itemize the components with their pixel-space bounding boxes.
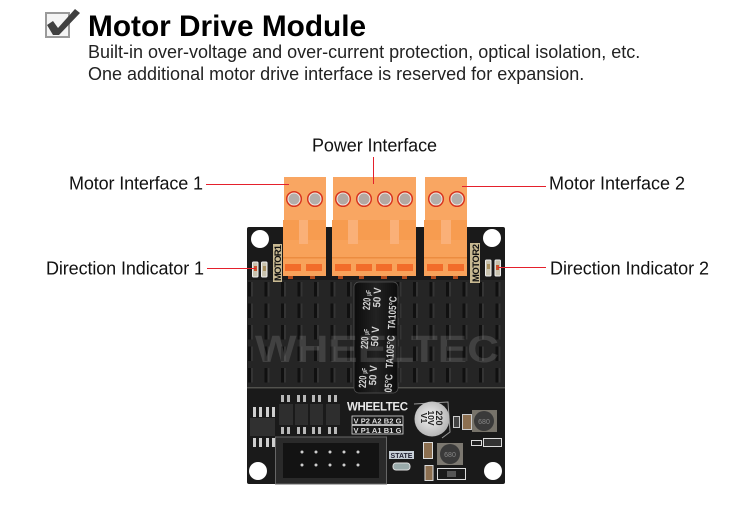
pin label block: V P1 A1 B1 G: [354, 426, 402, 435]
mounting holes: [249, 229, 502, 480]
small components: [424, 414, 502, 480]
pin label block: [352, 416, 403, 435]
inductor top: 680: [478, 419, 490, 426]
watermark: WHEELTEC: [255, 329, 499, 371]
silkscreen label MOTOR1: MOTOR1: [273, 244, 284, 281]
silkscreen label MOTOR2: MOTOR2: [471, 244, 482, 282]
connector: power interface: [332, 177, 416, 279]
leader lines: [206, 157, 546, 268]
optocoupler chips: [250, 395, 340, 447]
icon: checkbox with check mark: [46, 9, 80, 37]
direction indicator LEDs 1: [252, 262, 267, 277]
connector: motor interface 1: [283, 177, 326, 279]
title: Motor Drive Module: [88, 10, 366, 43]
ribbon header socket: [276, 437, 386, 484]
electrolytic capacitor small: 220: [434, 410, 444, 426]
label: motor interface 2: Motor Interface 2: [549, 174, 685, 194]
connector: motor interface 2: [424, 177, 467, 279]
direction indicator LEDs 2: [486, 260, 500, 276]
heatsink: [247, 280, 505, 388]
electrolytic capacitor small: [414, 402, 450, 438]
inductor bottom: 680: [444, 452, 456, 459]
capacitor: 220 µF: [359, 328, 372, 349]
capacitor: 50 V: [367, 365, 380, 386]
electrolytic capacitor small: 10V: [426, 410, 436, 426]
state indicator: [389, 451, 414, 470]
label: motor interface 1: Motor Interface 1: [69, 174, 203, 194]
silkscreen brand: WHEELTEC: [347, 402, 408, 414]
capacitor: TA105°C: [382, 374, 396, 407]
description text: Built-in over-voltage and over-current protection, optical isolation, etc.: [88, 42, 640, 62]
pin label block: V P2 A2 B2 G: [354, 416, 402, 426]
capacitor: 220 µF: [357, 367, 370, 388]
label: direction indicator 1: Direction Indicator 1: [46, 258, 204, 278]
module board photo: [247, 177, 505, 484]
inductor top: [472, 410, 497, 432]
capacitor: TA105°C: [384, 335, 398, 369]
electrolytic capacitor small: V1: [419, 413, 429, 423]
state indicator: STATE: [391, 453, 413, 460]
label: power interface: Power Interface: [312, 136, 437, 156]
description text: One additional motor drive interface is reserved for expansion.: [88, 64, 584, 84]
capacitor: TA105°C: [386, 296, 400, 330]
capacitor: 50 V: [371, 287, 384, 308]
inductor bottom: [437, 443, 463, 465]
capacitor: 50 V: [369, 326, 382, 347]
description text: [88, 42, 640, 84]
capacitor: [354, 282, 398, 394]
circuit board: [247, 227, 505, 484]
label: direction indicator 2: Direction Indicator 2: [550, 258, 709, 278]
capacitor: 220 µF: [361, 289, 374, 310]
